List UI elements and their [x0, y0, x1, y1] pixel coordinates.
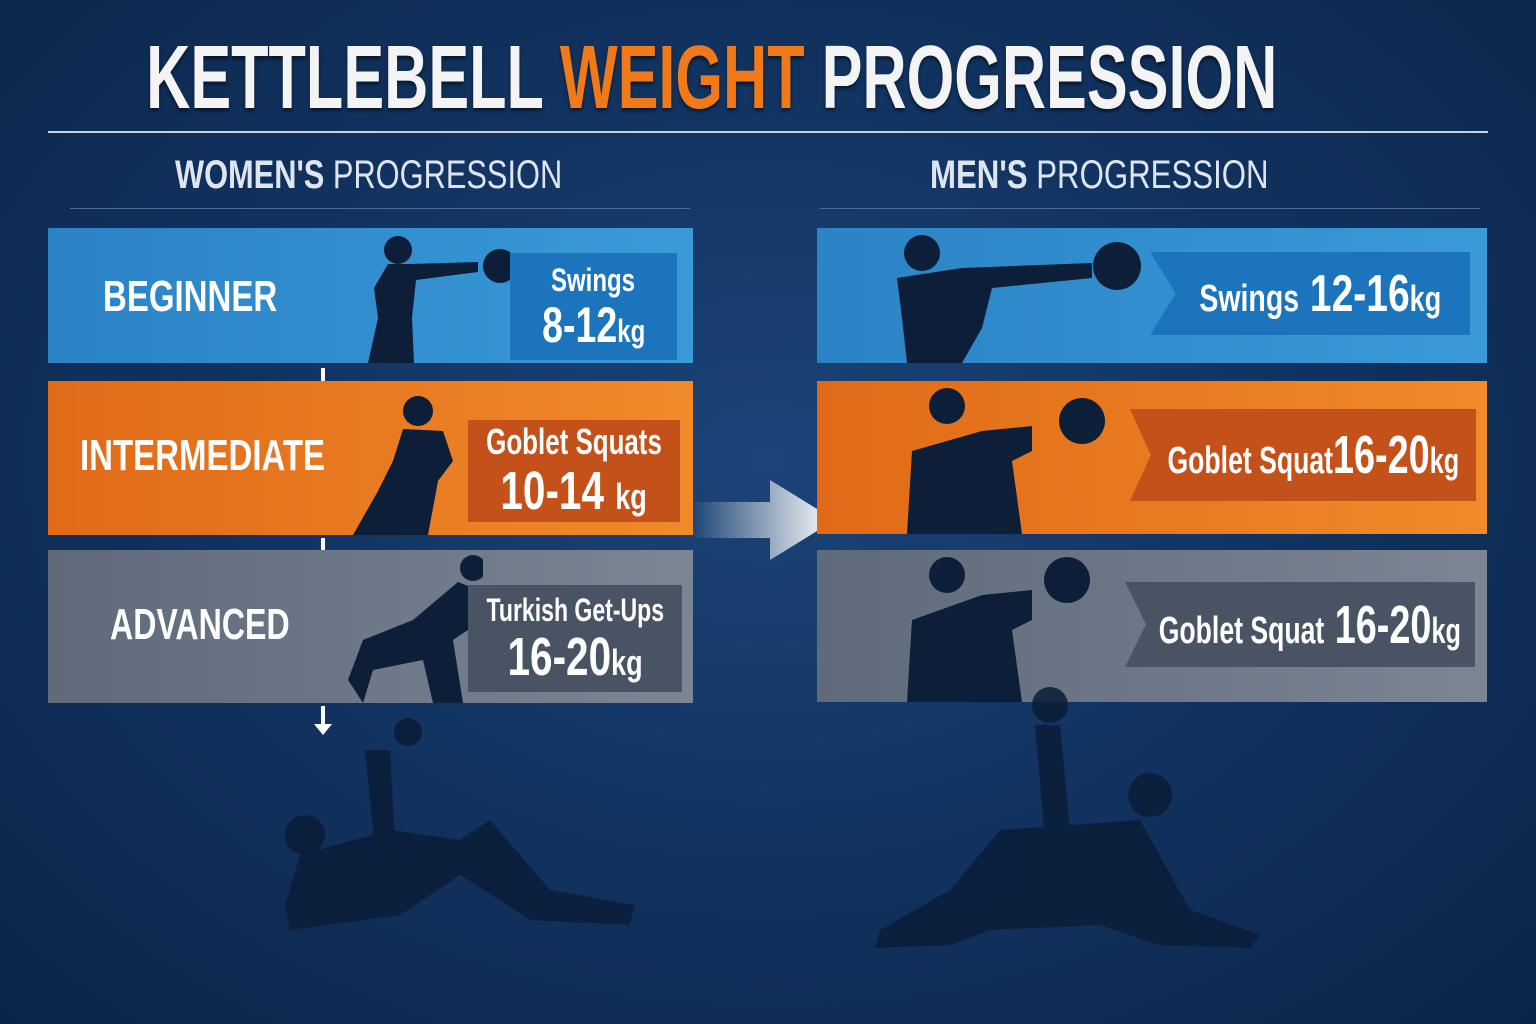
- icon: man swinging kettlebell: [897, 235, 1141, 363]
- callout: swings 8-12 kg: Swings: [551, 262, 635, 298]
- callout: goblet squats 10-14 kg: Goblet Squats: [486, 421, 662, 462]
- panel: men beginner: [817, 228, 1487, 363]
- icon: woman goblet squat: [353, 396, 453, 535]
- callout: goblet squats 10-14 kg: [468, 420, 680, 522]
- callout: swings 8-12 kg: 8-12kg: [542, 296, 645, 352]
- icon: woman lying with dumbbell: [285, 718, 635, 930]
- icon: man lying with kettlebell: [875, 687, 1260, 948]
- panel: women advanced: [48, 550, 693, 703]
- callout: goblet squat 16-20 kg: Goblet Squat16-20kg: [1167, 425, 1459, 485]
- panel: men advanced: [817, 550, 1487, 702]
- label: advanced: ADVANCED: [110, 600, 290, 649]
- callout: swings 12-16 kg: [1150, 252, 1470, 335]
- panel: men intermediate: [817, 381, 1487, 534]
- arrow: down 1: [321, 368, 325, 381]
- callout: swings 8-12 kg: [510, 253, 677, 360]
- arrow: right big: [696, 480, 817, 560]
- label: beginner: BEGINNER: [103, 272, 277, 321]
- icon: man goblet squat: [907, 388, 1105, 534]
- callout: swings 12-16 kg: Swings 12-16kg: [1199, 264, 1441, 322]
- callout: goblet squat 16-20 kg: [1125, 582, 1475, 667]
- panel: women beginner: [48, 228, 693, 363]
- callout: goblet squats 10-14 kg: 10-14 kg: [501, 461, 647, 521]
- arrow: down 2: [321, 538, 325, 550]
- callout: turkish get-ups 16-20 kg: Turkish Get-Ups: [486, 592, 664, 628]
- title: KETTLEBELL WEIGHT PROGRESSION: [146, 28, 1278, 128]
- icon: woman swinging kettlebell: [368, 236, 511, 363]
- callout: goblet squat 16-20 kg: Goblet Squat 16-20kg: [1159, 594, 1461, 654]
- heading: women's progression: WOMEN'S PROGRESSION: [175, 153, 562, 197]
- arrow: down 3: [314, 706, 332, 735]
- callout: turkish get-ups 16-20 kg: 16-20kg: [507, 626, 643, 686]
- callout: goblet squat 16-20 kg: [1130, 409, 1476, 501]
- panel: women intermediate: [48, 381, 693, 535]
- icon: man goblet hold: [907, 557, 1090, 702]
- callout: turkish get-ups 16-20 kg: [468, 585, 682, 692]
- label: intermediate: INTERMEDIATE: [80, 431, 325, 480]
- icon: woman squatting: [348, 555, 483, 703]
- heading: men's progression: MEN'S PROGRESSION: [930, 153, 1269, 197]
